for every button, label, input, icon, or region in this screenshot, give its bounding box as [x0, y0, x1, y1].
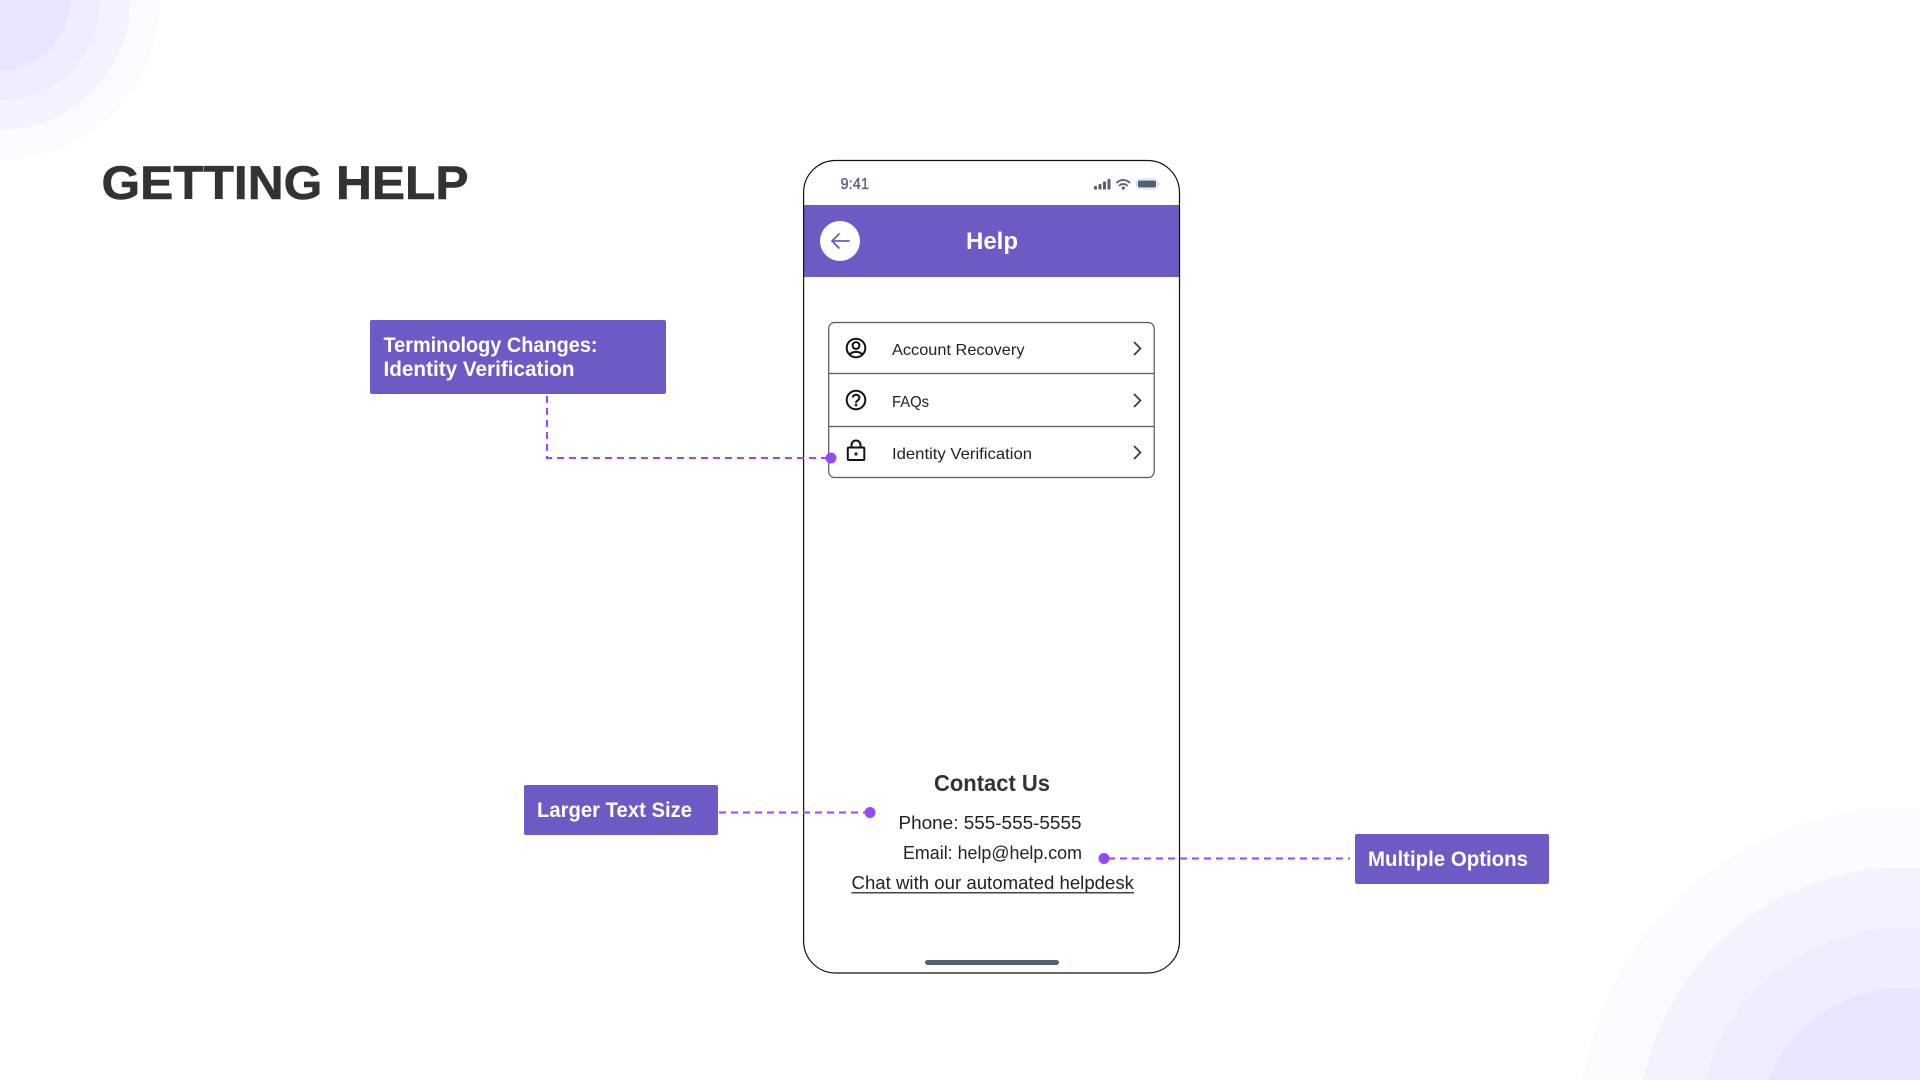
status bar [840, 176, 1160, 193]
callout: terminology changes: Identity Verification [384, 358, 574, 381]
icon: battery [1136, 179, 1160, 189]
icon: question circle [847, 391, 865, 409]
callout: multiple options: Multiple Options [1368, 848, 1528, 871]
callout: terminology changes [370, 320, 666, 394]
decoration: top-left concentric circles [0, 0, 160, 160]
phone outline [804, 160, 1180, 973]
icon: back arrow button [820, 221, 860, 261]
callout: larger text size [524, 785, 718, 835]
menu item: Account Recovery: Account Recovery [892, 342, 1024, 359]
home indicator [925, 960, 1059, 965]
panel: phone mockup [804, 160, 1180, 973]
icon: user circle [847, 339, 865, 357]
email: Email: help@help.com [903, 843, 1082, 863]
menu item: FAQs [847, 391, 1140, 411]
phone number: Phone: 555-555-5555 [898, 813, 1082, 833]
app header bar [804, 205, 1180, 277]
connector: terminology callout to identity verification [547, 396, 836, 464]
menu list [829, 322, 1154, 478]
menu item: Identity Verification [848, 441, 1140, 463]
menu item: Identity Verification: Identity Verification [892, 446, 1032, 463]
connector: larger text size [719, 807, 876, 818]
chat link: Chat with our automated helpdesk [852, 873, 1135, 893]
icon: signal bars [1094, 179, 1110, 190]
icon: wifi [1117, 180, 1130, 189]
title: GETTING HELP [102, 156, 468, 209]
connector: multiple options [1098, 853, 1350, 864]
callout: multiple options [1355, 834, 1549, 884]
contact heading: Contact Us [934, 770, 1050, 796]
header title: Help: Help [966, 228, 1018, 255]
icon: lock [848, 441, 864, 460]
menu item: FAQs: FAQs [892, 394, 929, 411]
status time: 9:41 [840, 176, 869, 193]
decoration: bottom-right concentric circles [1582, 808, 1920, 1080]
callout: larger text size: Larger Text Size [537, 799, 692, 822]
contact section [852, 770, 1135, 894]
menu item: Account Recovery [847, 339, 1140, 359]
callout: terminology changes: Terminology Changes: [384, 334, 598, 357]
